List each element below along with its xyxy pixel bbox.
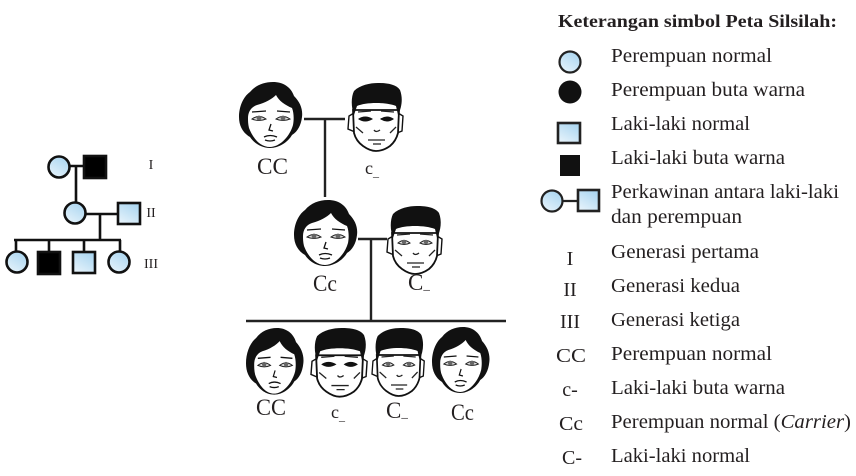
grandmother face	[239, 82, 302, 148]
legend descriptions: Generasi ketiga	[611, 309, 740, 331]
genotype labels: C	[408, 270, 423, 295]
pedigree connecting lines	[14, 166, 128, 252]
genotype labels: C	[386, 398, 401, 423]
genotype labels: _	[338, 409, 346, 423]
legend codes	[556, 248, 586, 469]
legend descriptions	[611, 45, 851, 467]
genotype labels: _	[400, 405, 408, 420]
connecting lines	[246, 119, 506, 321]
child face c-	[311, 328, 367, 397]
legend descriptions: Perempuan normal	[611, 45, 772, 67]
mother face	[294, 200, 357, 266]
generation labels: III	[144, 257, 158, 272]
legend descriptions: Laki-laki normal	[611, 445, 750, 467]
legend panel	[542, 11, 851, 469]
legend title: Keterangan simbol Peta Silsilah:	[558, 11, 837, 31]
generation labels	[144, 158, 158, 272]
legend codes: III	[560, 311, 580, 333]
legend codes: c-	[562, 379, 578, 401]
child face CC	[246, 328, 304, 395]
legend codes: Cc	[559, 413, 583, 435]
genotype labels: c	[365, 158, 373, 178]
legend descriptions: Perempuan buta warna	[611, 79, 805, 101]
legend codes: C-	[562, 447, 582, 469]
legend codes: CC	[556, 345, 586, 367]
legend descriptions: Perempuan normal	[611, 343, 772, 365]
genotype labels: Cc	[451, 400, 474, 425]
legend descriptions: Generasi pertama	[611, 241, 759, 263]
legend descriptions: Perkawinan antara laki-laki	[611, 181, 839, 203]
genotype labels: c	[331, 402, 339, 422]
inheritance family tree	[239, 82, 506, 425]
generation labels: I	[149, 158, 154, 173]
generation III children	[6, 252, 130, 274]
grandfather face	[348, 83, 403, 151]
legend descriptions: dan perempuan	[611, 206, 742, 228]
pedigree chart	[6, 156, 158, 274]
genotype labels	[256, 154, 474, 425]
legend symbols	[542, 52, 599, 212]
genotype labels: Cc	[313, 271, 337, 296]
genotype labels: _	[372, 165, 380, 179]
generation I couple	[48, 156, 106, 178]
legend codes: II	[563, 279, 577, 301]
legend descriptions: Perempuan normal ( Carrier)	[611, 411, 851, 433]
genotype labels: CC	[256, 395, 286, 420]
legend descriptions: Laki-laki normal	[611, 113, 750, 135]
generation labels: II	[146, 206, 156, 221]
child face Cc	[432, 327, 490, 393]
legend descriptions: Laki-laki buta warna	[611, 377, 785, 399]
father face	[387, 206, 442, 274]
genotype labels: CC	[257, 154, 288, 179]
genotype labels: _	[422, 277, 430, 292]
legend descriptions: Laki-laki buta warna	[611, 147, 785, 169]
generation II couple	[64, 202, 140, 224]
legend codes: I	[567, 248, 573, 270]
child face C-	[372, 328, 424, 396]
legend descriptions: Generasi kedua	[611, 275, 740, 297]
